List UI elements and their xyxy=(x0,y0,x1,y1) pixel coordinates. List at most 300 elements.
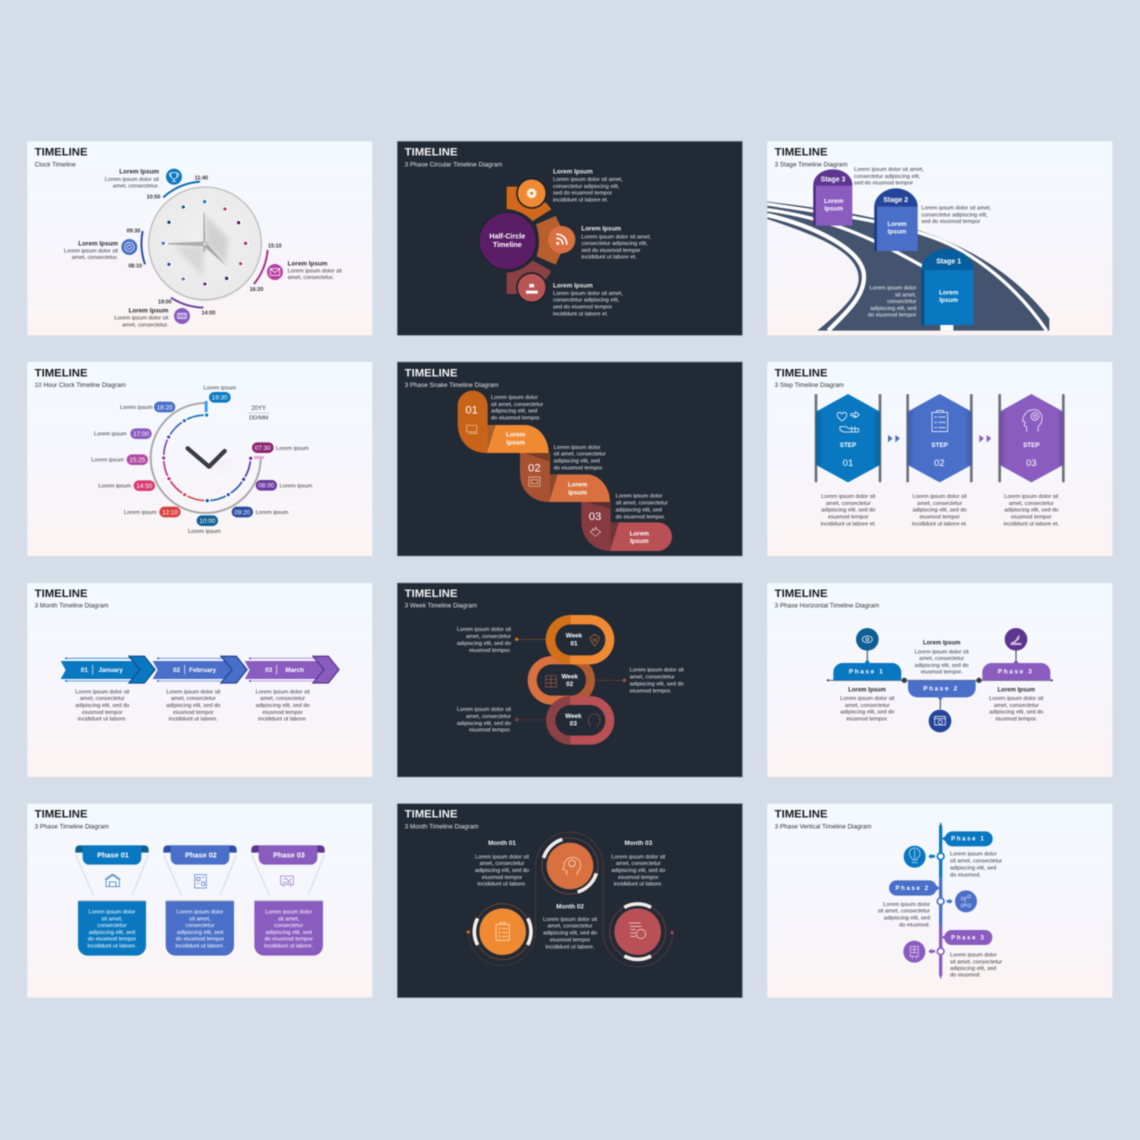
card: phase 01: Phase 01 xyxy=(97,850,129,859)
text: month 01: Month 01 xyxy=(488,840,516,847)
text block: second: consectetur adipiscing elit, xyxy=(581,241,648,247)
icon: keyboard xyxy=(174,308,190,324)
text: February: amet, consectetur xyxy=(171,696,216,702)
ring: week 01 xyxy=(546,615,614,664)
outer ring xyxy=(151,403,261,513)
text: step 3: adipiscing elit, sed do xyxy=(1004,508,1058,514)
date label: 20YY xyxy=(251,406,266,412)
time tags: 09:20 xyxy=(234,509,251,516)
text: week 01: Lorem ipsum dolor sit xyxy=(457,627,511,633)
text: phase 3: eiusmod tempor. xyxy=(995,717,1038,723)
arrow: March: 03 xyxy=(265,667,273,674)
text: stage 3: sed do eiusmod tempor xyxy=(854,181,913,187)
icon: phase 2 xyxy=(929,710,951,732)
text: phase 3: do eiusmod. xyxy=(950,973,981,979)
connector: week 01 xyxy=(515,638,546,641)
tag labels: Lorem ipsum xyxy=(188,529,221,535)
icon: phase 2 network xyxy=(955,890,977,912)
text: left callout xyxy=(64,241,118,261)
step 1 hexagon: STEP xyxy=(840,442,856,449)
text: stage 3: Lorem ipsum dolor sit amet, xyxy=(854,167,924,173)
time labels: 09:30 xyxy=(127,229,140,235)
text: phase 2: adipiscing elit, sed xyxy=(884,916,930,922)
sign: stage 1 xyxy=(921,249,973,325)
card: phase 01: incididunt ut labore. xyxy=(87,944,137,950)
panel: month arrows xyxy=(27,583,372,777)
road xyxy=(767,202,1049,331)
center circle xyxy=(479,212,536,270)
text: step 02: do eiusmod tempor. xyxy=(554,466,604,472)
title: TIMELINE xyxy=(35,588,88,600)
sign: stage 1: Ipsum xyxy=(939,297,958,304)
text: step 2: incididunt ut labore et. xyxy=(912,522,968,528)
text: step 3: eiusmod tempor xyxy=(1011,515,1052,521)
text block: second: Lorem Ipsum xyxy=(581,226,621,233)
phase 2 pill: Phase 2 xyxy=(896,886,930,892)
arrow: March: March xyxy=(285,667,304,674)
step 03: Ipsum xyxy=(630,538,649,545)
tag labels xyxy=(91,386,313,535)
arrow: March xyxy=(245,656,339,683)
text: stage 1: Lorem ipsum dolor xyxy=(869,285,916,291)
sign: stage 3 xyxy=(813,169,852,226)
text block: third: Lorem ipsum dolor sit amet, xyxy=(553,291,623,297)
text: February: adipiscing elit, sed do xyxy=(166,703,220,709)
title: TIMELINE xyxy=(775,809,828,821)
step 1 hexagon: 01 xyxy=(843,458,853,468)
text: bottom callout: Lorem ipsum dolor sit xyxy=(114,316,169,322)
phase 1 tab: Phase 1 xyxy=(849,669,884,676)
step 1 hexagon xyxy=(815,394,881,482)
text: phase 3: sit amet, consectetur xyxy=(950,959,1002,965)
text: left callout: Lorem ipsum dolor sit xyxy=(64,248,118,254)
text: March: Lorem ipsum dolor sit xyxy=(256,689,310,695)
card: phase 01: do eiusmod tempor xyxy=(88,937,136,943)
step 03 xyxy=(581,502,672,551)
time tags: 07:30 xyxy=(255,445,271,452)
panel: vertical phases xyxy=(767,804,1112,998)
text: stage 1: consectetur xyxy=(887,299,916,305)
text: step 01: adipiscing elit, sed xyxy=(491,409,537,415)
phase 3 tab: Phase 3 xyxy=(998,669,1033,676)
text: week 03: Lorem ipsum dolor sit xyxy=(457,707,511,713)
step 3 hexagon: STEP xyxy=(1023,442,1040,449)
text: stage 1: adipiscing elit, sed xyxy=(870,306,916,312)
ring: week 02: Week xyxy=(561,673,578,680)
text: step 03: do eiusmod tempor. xyxy=(616,514,666,520)
text: phase 1: Lorem ipsum dolor sit xyxy=(840,696,895,702)
step 01: Lorem xyxy=(506,432,526,439)
arrow: February: February xyxy=(189,667,217,674)
connector: week 03 xyxy=(515,718,546,721)
card: phase 02: sit amet, xyxy=(189,916,211,922)
text block: first: Lorem Ipsum xyxy=(553,169,593,176)
time tags: 10:00 xyxy=(199,518,216,525)
text: week 02: amet, consectetur xyxy=(630,674,675,680)
time tags: 12:10 xyxy=(162,509,178,516)
title: TIMELINE xyxy=(405,588,458,600)
text: stage 1: do eiusmod tempor xyxy=(868,313,916,319)
text: step 1: adipiscing elit, sed do xyxy=(821,508,875,514)
text: week 03: eiusmod tempor. xyxy=(469,728,511,734)
title: TIMELINE xyxy=(35,809,88,821)
icon: envelope xyxy=(267,264,283,280)
text: month 03: amet, consectetur xyxy=(616,861,661,867)
text: phase 3: adipiscing elit, sed xyxy=(950,966,996,972)
circle: month 03 xyxy=(610,904,666,960)
text: phase 2 xyxy=(915,640,969,676)
step 01 xyxy=(458,391,549,453)
card: phase 03: consectetur xyxy=(274,923,303,929)
text: step 02: sit amet, consectetur xyxy=(554,452,606,458)
sign: stage 1: Lorem xyxy=(939,289,959,296)
text: stage 1: sit amet, xyxy=(895,292,917,298)
text: phase 1: Lorem ipsum dolor xyxy=(950,852,997,858)
sign: stage 3: Ipsum xyxy=(824,206,843,213)
icon: trophy xyxy=(166,169,182,185)
title: TIMELINE xyxy=(405,367,458,379)
text: step 01: Lorem ipsum dolor xyxy=(491,395,538,401)
text: phase 3: Lorem Ipsum xyxy=(998,687,1035,693)
text: month 01: incididunt ut labore. xyxy=(477,882,527,888)
text: phase 1: do eiusmod. xyxy=(950,872,981,878)
step 02: Ipsum xyxy=(568,489,587,496)
text: phase 1: adipiscing elit, sed xyxy=(950,865,996,871)
arc: 09:30 to 08:10 xyxy=(141,231,145,264)
card: phase 01: adipiscing elit, sed xyxy=(89,930,135,936)
text: stage 2: Lorem ipsum dolor sit amet, xyxy=(921,205,992,211)
text: month 03 xyxy=(611,840,666,888)
text: week 01: eiusmod tempor. xyxy=(469,648,511,654)
text: week 01: amet, consectetur xyxy=(466,634,511,640)
text: phase 1: sit amet, consectetur xyxy=(950,859,1002,865)
text: step 3: Lorem ipsum dolor sit xyxy=(1004,494,1059,500)
step 03: 03 xyxy=(589,511,601,523)
text: month 01: adipiscing elit, sed do xyxy=(475,868,529,874)
time labels: 14:00 xyxy=(202,311,215,317)
text: March: eiusmod tempor xyxy=(262,710,303,716)
time labels xyxy=(127,175,282,317)
vertical line xyxy=(939,822,942,979)
text: month 03: adipiscing elit, sed do xyxy=(611,868,665,874)
text: right callout xyxy=(288,261,342,281)
text: stage 2: sed do eiusmod tempor xyxy=(921,219,981,225)
tag labels: Lorem ipsum xyxy=(98,484,131,490)
icon: phase 1 bulb xyxy=(904,846,926,868)
tag labels: Lorem ipsum xyxy=(276,446,309,452)
time labels: 08:10 xyxy=(128,264,142,270)
segment: bottom xyxy=(507,260,551,294)
text: left callout: amet, consectetur. xyxy=(72,255,118,261)
text: month 02: amet, consectetur xyxy=(548,924,593,930)
arrow: January: January xyxy=(99,667,123,674)
text: phase 3 xyxy=(989,687,1044,723)
text block: third xyxy=(553,282,623,317)
time labels: 11:40 xyxy=(195,175,208,181)
card: phase 02: incididunt ut labore. xyxy=(175,944,225,950)
text: January: adipiscing elit, sed do xyxy=(75,703,129,709)
icon: phase 3 xyxy=(903,941,925,963)
arrow: January: 01 xyxy=(81,667,88,674)
step 2 hexagon: STEP xyxy=(931,442,948,449)
connector: week 02 xyxy=(596,679,626,682)
phase 2 tab xyxy=(908,680,976,709)
text block: second: Lorem ipsum dolor sit amet, xyxy=(581,234,652,240)
text: January: eiusmod tempor xyxy=(82,710,123,716)
text: week 03: amet, consectetur xyxy=(466,714,511,720)
subtitle: 3 Step Timeline Diagram xyxy=(775,382,844,389)
subtitle: 3 Phase Snake Timeline Diagram xyxy=(405,382,499,389)
subtitle: 3 Phase Timeline Diagram xyxy=(35,823,109,830)
text: February: Lorem ipsum dolor sit xyxy=(166,689,221,695)
title: TIMELINE xyxy=(35,367,88,379)
text: month 03: incididunt ut labore. xyxy=(614,882,663,888)
title: TIMELINE xyxy=(775,147,828,159)
text: bottom callout xyxy=(114,308,169,328)
text: step 2: amet, consectetur xyxy=(917,501,962,507)
text: phase 3: amet, consectetur xyxy=(994,703,1039,709)
ring: week 01: Week xyxy=(566,633,583,640)
text: March: incididunt ut labore. xyxy=(258,717,308,723)
text: step 3: incididunt ut labore et. xyxy=(1004,522,1059,528)
text: top callout: Lorem Ipsum xyxy=(119,169,159,176)
tag labels: Lorem ipsum xyxy=(256,510,289,516)
text: step 1: Lorem ipsum dolor sit xyxy=(821,494,876,500)
text: phase 1: amet, consectetur xyxy=(845,703,890,709)
title: TIMELINE xyxy=(405,147,458,159)
ring: week 01: 01 xyxy=(570,640,578,647)
text: month 01: amet, consectetur xyxy=(480,861,525,867)
text: step 2: eiusmod tempor xyxy=(919,515,960,521)
text: week 01: adipiscing elit, sed do xyxy=(457,641,511,647)
ring: week 03: Week xyxy=(565,713,582,720)
subtitle: 3 Phase Horizontal Timeline Diagram xyxy=(775,603,879,610)
text: week 02: Lorem ipsum dolor sit xyxy=(630,668,684,674)
text: month 02: incididunt ut labore. xyxy=(545,944,595,950)
text: month 02: eiusmod tempor xyxy=(550,937,590,943)
text: right callout: Lorem ipsum dolor sit xyxy=(288,268,342,274)
phase 3 pill: Phase 3 xyxy=(951,935,985,941)
time labels: 16:20 xyxy=(250,287,263,293)
icon: gear xyxy=(121,239,137,255)
text block: third: incididunt ut labore et. xyxy=(553,311,609,317)
text: step 2: adipiscing elit, sed do xyxy=(913,508,967,514)
text: phase 1 xyxy=(840,687,895,723)
text: phase 2: Lorem Ipsum xyxy=(923,640,960,646)
text: phase 3: adipiscing elit, sed do xyxy=(989,710,1043,716)
circle: month 01 xyxy=(474,904,531,960)
text: phase 1: eiusmod tempor. xyxy=(846,717,889,723)
text: left callout: Lorem Ipsum xyxy=(78,241,118,248)
center circle: Half-Circle xyxy=(489,233,525,241)
sign: stage 3: Lorem xyxy=(824,198,844,205)
step 02 xyxy=(520,453,610,502)
progress nodes xyxy=(161,412,254,504)
tag labels: Lorem ipsum xyxy=(280,484,313,490)
arc: 10:50 to 11:40 xyxy=(163,182,200,197)
card: phase 02 xyxy=(163,845,237,956)
clock face xyxy=(148,187,262,301)
subtitle: 3 Stage Timeline Diagram xyxy=(775,161,847,168)
phase 1 pill xyxy=(942,831,993,846)
text block: third: sed do eiusmod tempor xyxy=(553,305,612,311)
arrow: step 2 to 3 xyxy=(979,435,991,442)
text: step 2: Lorem ipsum dolor sit xyxy=(913,494,967,500)
segment: middle xyxy=(536,216,562,265)
text block: first: consectetur adipiscing elit, xyxy=(553,184,620,190)
title: TIMELINE xyxy=(775,367,828,379)
card: phase 01: consectetur xyxy=(97,923,127,929)
ring start markers xyxy=(205,401,264,459)
phase 2 pill xyxy=(889,880,940,896)
ring: week 03 xyxy=(546,696,614,745)
step 02: 02 xyxy=(528,462,541,474)
icon: network circle xyxy=(517,273,546,302)
tag labels: Lorem ipsum xyxy=(203,386,236,392)
text: phase 2: sit amet, consectetur xyxy=(878,909,930,915)
text: month 03: Month 03 xyxy=(624,840,653,847)
phase 3 tab xyxy=(982,650,1050,680)
ring: week 02 xyxy=(528,656,595,705)
panel: week rings xyxy=(397,583,742,777)
text: phase 1: adipiscing elit, sed do xyxy=(840,710,894,716)
sign: stage 2: Lorem xyxy=(887,221,907,228)
step 3 hexagon: 03 xyxy=(1026,458,1037,468)
phase 1 pill: Phase 1 xyxy=(951,837,985,843)
text block: third: consectetur adipiscing elit, xyxy=(553,298,620,304)
tag labels: Lorem ipsum xyxy=(120,405,153,411)
text: January: amet, consectetur xyxy=(80,696,125,702)
time tags: 15:25 xyxy=(129,457,146,464)
text: February: eiusmod tempor xyxy=(173,710,214,716)
text: top callout xyxy=(105,169,159,190)
title: TIMELINE xyxy=(35,147,88,159)
card: phase 03: sit amet, xyxy=(278,916,300,922)
text: February: incididunt ut labore. xyxy=(169,717,218,723)
arrow: step 1 to 2 xyxy=(888,435,900,442)
text: phase 2: adipiscing elit, sed do xyxy=(915,663,969,669)
arc: 15:10 to 16:20 xyxy=(254,250,268,284)
title: TIMELINE xyxy=(775,588,828,600)
text: step 03: Lorem ipsum dolor xyxy=(616,494,663,500)
phase 1 tab xyxy=(833,650,901,680)
subtitle: 3 Week Timeline Diagram xyxy=(405,603,477,610)
text: right callout: amet, consectetur. xyxy=(288,275,334,281)
text: step 1: amet, consectetur xyxy=(826,501,871,507)
text block: third: Lorem Ipsum xyxy=(553,282,593,289)
panel: step timeline xyxy=(767,362,1112,556)
tag labels: Lorem ipsum xyxy=(124,510,157,516)
date label: DD/MM xyxy=(249,416,269,422)
text: month 03: Lorem ipsum dolor sit xyxy=(611,854,666,860)
text: month 02: Lorem ipsum dolor sit xyxy=(543,917,597,923)
card: phase 01 xyxy=(75,845,149,956)
panel: horizontal phases xyxy=(767,583,1112,777)
step 01: Ipsum xyxy=(506,439,525,446)
circle: month 02 xyxy=(542,838,598,894)
card: phase 01: Lorem ipsum dolor xyxy=(89,909,136,915)
text: right callout: Lorem Ipsum xyxy=(288,261,328,268)
time tags: 17:00 xyxy=(133,431,149,438)
sign: stage 2 xyxy=(874,188,918,251)
panel: clock timeline xyxy=(27,141,372,335)
time tags: 18:20 xyxy=(157,404,173,411)
text: step 02: adipiscing elit, sed xyxy=(554,459,600,465)
subtitle: 3 Month Timeline Diagram xyxy=(405,823,479,830)
text block: second: incididunt ut labore et. xyxy=(581,255,637,261)
colored progress arc xyxy=(164,415,251,501)
step 03: Lorem xyxy=(630,530,649,537)
text block: first: incididunt ut labore et. xyxy=(553,198,609,204)
panel: half circle timeline xyxy=(397,141,742,335)
text block: first: Lorem ipsum dolor sit amet, xyxy=(553,177,623,183)
time tags: 08:00 xyxy=(258,483,275,490)
sign: stage 3: Stage 3 xyxy=(821,177,846,184)
card: phase 03: incididunt ut labore. xyxy=(264,944,314,950)
arrow: February xyxy=(153,656,247,683)
icon: phase 1 xyxy=(856,628,879,651)
arc: 19:00 to 14:00 xyxy=(171,298,203,308)
card: phase 03: adipiscing elit, sed xyxy=(266,930,312,936)
text: top callout: amet, consectetur. xyxy=(113,184,159,190)
text: month 01: eiusmod tempor xyxy=(482,875,522,881)
phase 2 tab: Phase 2 xyxy=(923,685,959,692)
card: phase 02: consectetur xyxy=(185,923,215,929)
time tags xyxy=(127,392,277,526)
panel: phase cards xyxy=(27,804,372,998)
text: March: amet, consectetur xyxy=(260,696,305,702)
step 02: Lorem xyxy=(568,482,588,489)
text: step 1: incididunt ut labore et. xyxy=(821,522,876,528)
panel: snake timeline xyxy=(397,362,742,556)
sign: stage 1: Stage 1 xyxy=(936,259,961,266)
node and arrow: phase 3 xyxy=(928,948,944,955)
text: step 03: sit amet, consectetur xyxy=(616,501,668,507)
phase 3 pill xyxy=(942,930,992,945)
text: week 03: adipiscing elit, sed do xyxy=(457,721,511,727)
time tags: 19:30 xyxy=(212,395,228,402)
text: stage 2: consectetur adipiscing elit, xyxy=(921,212,988,218)
card: phase 02: Lorem ipsum dolor xyxy=(177,909,224,915)
baseline xyxy=(827,678,1053,683)
panel: stage road timeline xyxy=(767,141,1112,335)
center circle: Timeline xyxy=(493,241,522,249)
card: phase 02: Phase 02 xyxy=(185,850,217,859)
text: month 02 xyxy=(543,903,597,950)
title: TIMELINE xyxy=(405,809,458,821)
node and arrow: phase 1 xyxy=(928,853,944,860)
text: phase 1: Lorem Ipsum xyxy=(848,687,886,693)
date label xyxy=(248,406,269,422)
panel: 10 hour clock timeline xyxy=(27,362,372,556)
text block: first xyxy=(553,169,623,204)
text: week 02: eiusmod tempor. xyxy=(630,688,672,694)
clock hands xyxy=(188,448,233,482)
text: top callout: Lorem ipsum dolor sit xyxy=(105,177,159,183)
sign: stage 2: Ipsum xyxy=(888,229,907,236)
step 2 hexagon: 02 xyxy=(934,458,945,468)
text: step 01: sit amet, consectetur xyxy=(491,402,543,408)
time labels: 15:10 xyxy=(268,243,282,249)
icon: gear circle xyxy=(517,179,546,208)
text block: second: sed do eiusmod tempor xyxy=(581,248,641,254)
text: step 1: eiusmod tempor xyxy=(828,515,869,521)
step 2 hexagon xyxy=(906,394,973,482)
sign: stage 2: Stage 2 xyxy=(883,197,908,204)
icon: phase 3 xyxy=(1005,628,1027,651)
text: week 02: adipiscing elit, sed do xyxy=(630,681,684,687)
card: phase 03: do eiusmod tempor xyxy=(264,937,313,943)
